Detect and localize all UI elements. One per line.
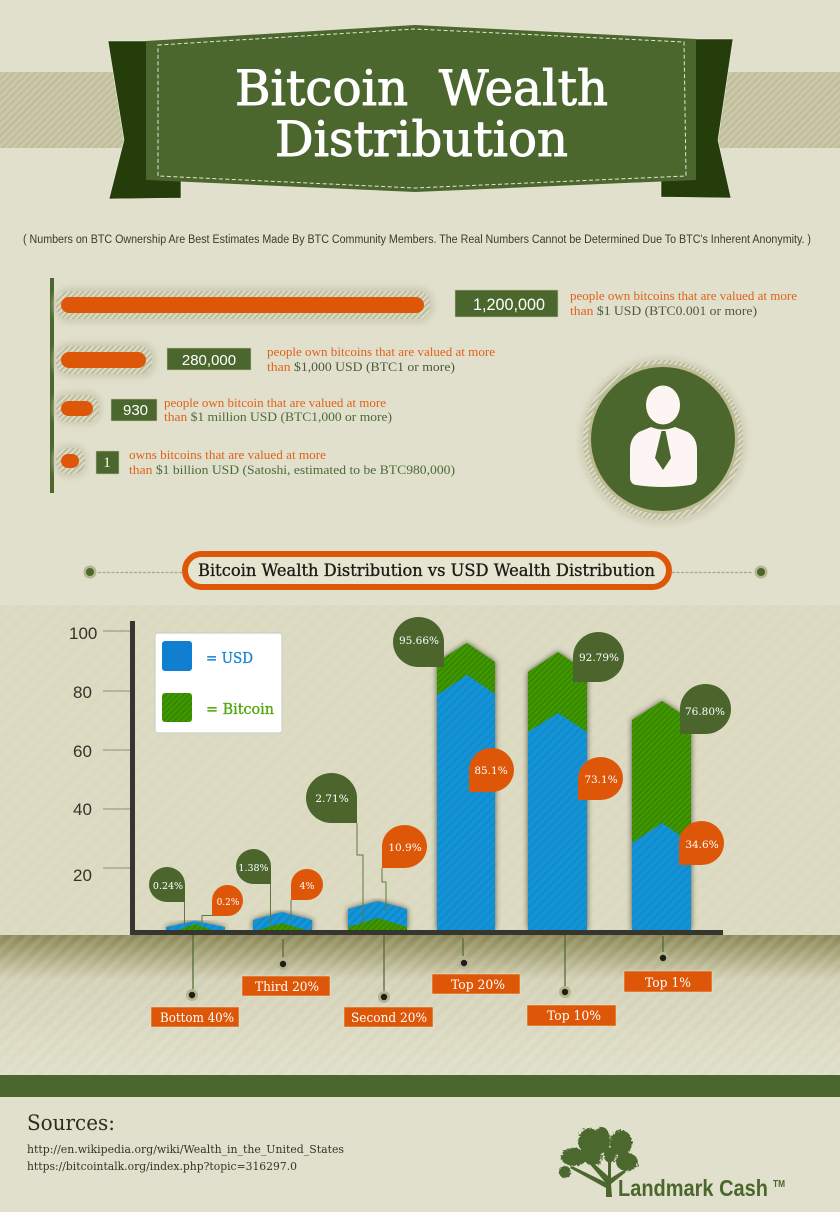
sources: https://bitcointalk.org/index.php?topic=316297.0 xyxy=(27,1159,297,1173)
logo: Landmark Cash: TM xyxy=(773,1179,785,1190)
category labels xyxy=(151,935,712,1027)
callout 92.79%: 92.79% xyxy=(579,652,619,664)
callout 10.9% xyxy=(382,825,427,868)
callout 73.1% xyxy=(578,757,623,800)
callout 85.1% xyxy=(469,748,514,792)
axes xyxy=(130,621,723,935)
row: 1,200,000: 1,200,000 xyxy=(473,295,545,314)
callout 2.71% xyxy=(306,773,357,823)
sources xyxy=(27,1111,344,1173)
legend xyxy=(155,633,282,733)
icon: person in circle xyxy=(579,357,747,525)
pin lines xyxy=(193,935,663,991)
bar: Bottom 40% xyxy=(166,921,225,930)
callout 34.6% xyxy=(679,821,724,865)
callout 76.80%: 76.80% xyxy=(685,706,725,718)
logo: Landmark Cash: Landmark Cash xyxy=(618,1175,768,1201)
label: Third 20% xyxy=(242,976,330,996)
row: 930: 930 xyxy=(123,402,148,419)
callout 76.80% xyxy=(680,684,731,734)
callout 4% xyxy=(291,869,323,900)
label: Top 10% xyxy=(527,1005,616,1026)
ribbon tails xyxy=(108,39,733,199)
sources: Sources: xyxy=(27,1111,115,1135)
ownership panel xyxy=(50,278,797,493)
callout 4%: 4% xyxy=(299,881,315,892)
pin dots xyxy=(186,952,669,1003)
green footer band xyxy=(0,1075,840,1097)
callout 34.6%: 34.6% xyxy=(685,839,719,851)
label: Top 20% xyxy=(432,974,520,994)
callout 73.1%: 73.1% xyxy=(584,774,618,786)
sources: http://en.wikipedia.org/wiki/Wealth_in_the_United_States xyxy=(27,1142,344,1156)
row: 1 xyxy=(54,444,455,478)
callout 95.66%: 95.66% xyxy=(399,635,439,647)
bar: Third 20% xyxy=(253,912,312,930)
label: Bottom 40%: Bottom 40% xyxy=(160,1011,234,1026)
callout 0.24% xyxy=(149,867,185,902)
y axis labels xyxy=(69,624,97,885)
row: 930 xyxy=(54,391,392,425)
vertical rule xyxy=(50,278,54,493)
row: 1: 1 xyxy=(103,455,111,471)
callouts: bitcoin share xyxy=(149,617,731,902)
row: 280,000 xyxy=(54,342,495,378)
y axis labels: 60 xyxy=(73,742,92,761)
y axis labels: 80 xyxy=(73,683,92,702)
y axis labels: 40 xyxy=(73,800,92,819)
title text xyxy=(235,60,608,168)
label: Third 20%: Third 20% xyxy=(255,980,319,995)
chart background xyxy=(0,605,840,935)
callout 0.24%: 0.24% xyxy=(153,881,183,892)
stitched border xyxy=(158,29,686,188)
callouts: USD share xyxy=(212,748,724,916)
bar: Top 10% xyxy=(528,652,587,930)
row: 280,000: people own bitcoins that are valued at more xyxy=(267,345,495,359)
callout 95.66% xyxy=(393,617,444,667)
legend: = Bitcoin xyxy=(206,700,274,718)
callout 10.9%: 10.9% xyxy=(388,842,422,854)
label: Top 20%: Top 20% xyxy=(451,978,505,993)
callout 2.71%: 2.71% xyxy=(315,793,349,805)
row: 280,000: than $1,000 USD (BTC1 or more) xyxy=(267,359,455,374)
row: 1: than $1 billion USD (Satoshi, estimated to be BTC980,000) xyxy=(129,462,455,477)
ground gradient xyxy=(0,935,840,1075)
row: 930: than $1 million USD (BTC1,000 or more) xyxy=(164,409,392,424)
label: Top 10%: Top 10% xyxy=(547,1009,601,1024)
callout 1.38% xyxy=(236,849,271,884)
callout 1.38%: 1.38% xyxy=(238,863,269,874)
title text: Bitcoin Wealth xyxy=(235,60,608,117)
y axis labels: 20 xyxy=(73,866,92,885)
row: 1,200,000: than $1 USD (BTC0.001 or more) xyxy=(570,303,757,318)
label: Second 20% xyxy=(344,1007,433,1027)
chart xyxy=(69,617,731,935)
callout 0.2% xyxy=(212,885,243,916)
hatched band behind banner xyxy=(0,72,840,148)
callout 0.2%: 0.2% xyxy=(217,898,240,908)
row: 1,200,000: people own bitcoins that are valued at more xyxy=(570,289,797,303)
label: Top 1% xyxy=(624,971,712,992)
heading connectors xyxy=(98,572,182,574)
icon: tree xyxy=(559,1127,638,1197)
label: Second 20%: Second 20% xyxy=(351,1011,427,1026)
banner body xyxy=(146,25,696,192)
row: 930: people own bitcoin that are valued at more xyxy=(164,396,386,410)
row: 280,000: 280,000 xyxy=(182,352,236,369)
label: Bottom 40% xyxy=(151,1007,239,1027)
title text: Distribution xyxy=(275,111,568,168)
callout 92.79% xyxy=(573,632,624,682)
row: 1,200,000 xyxy=(54,287,797,323)
bar: Second 20% xyxy=(348,901,407,930)
callout 85.1%: 85.1% xyxy=(474,765,508,777)
legend: = USD xyxy=(206,649,253,667)
logo: Landmark Cash xyxy=(559,1127,785,1201)
section heading: Bitcoin Wealth Distribution vs USD Wealth Distribution xyxy=(198,561,655,581)
bar: Top 20% xyxy=(437,643,495,930)
title banner xyxy=(0,25,840,199)
label: Top 1%: Top 1% xyxy=(645,976,691,991)
y axis labels: 100 xyxy=(69,624,97,643)
row: 1: owns bitcoins that are valued at more xyxy=(129,448,326,462)
heading pill xyxy=(185,554,669,587)
y axis ticks xyxy=(103,631,130,868)
callout connectors xyxy=(184,823,386,927)
bar: Top 1% xyxy=(632,701,691,930)
section heading xyxy=(84,554,768,587)
